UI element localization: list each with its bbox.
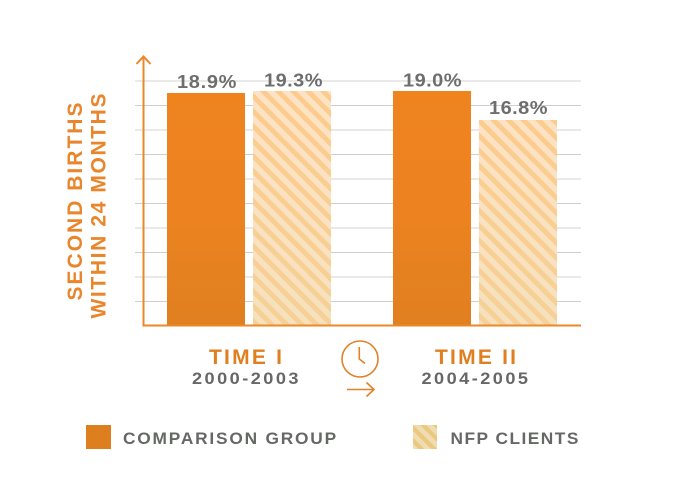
bar: Time II NFP clients — [479, 120, 557, 326]
label: Time I: 2000-2003 — [192, 369, 299, 388]
label: Time I — [192, 346, 299, 388]
legend: NFP clients: NFP CLIENTS — [450, 429, 578, 448]
bar: Time I NFP clients — [253, 91, 331, 326]
axes with arrow — [136, 56, 581, 326]
value labels: 18.9% — [177, 73, 236, 93]
y axis title: WITHIN 24 MONTHS — [88, 94, 110, 318]
legend: comparison group: COMPARISON GROUP — [123, 429, 336, 448]
bar: Time I comparison group — [167, 93, 245, 326]
y axis title — [64, 94, 110, 318]
icon: clock with arrow — [342, 341, 378, 396]
y axis title: SECOND BIRTHS — [64, 102, 87, 300]
value labels: 19.3% — [264, 71, 323, 91]
legend: comparison group — [86, 425, 336, 449]
value labels: 19.0% — [403, 71, 462, 91]
label: Time II — [422, 346, 528, 388]
label: Time II: 2004-2005 — [422, 369, 528, 388]
label: Time I: TIME I — [209, 346, 282, 369]
value labels — [177, 71, 548, 119]
label: Time II: TIME II — [435, 346, 516, 369]
legend: NFP clients — [413, 425, 578, 449]
grid lines — [135, 81, 581, 302]
value labels: 16.8% — [489, 99, 548, 119]
bar: Time II comparison group — [393, 91, 471, 326]
